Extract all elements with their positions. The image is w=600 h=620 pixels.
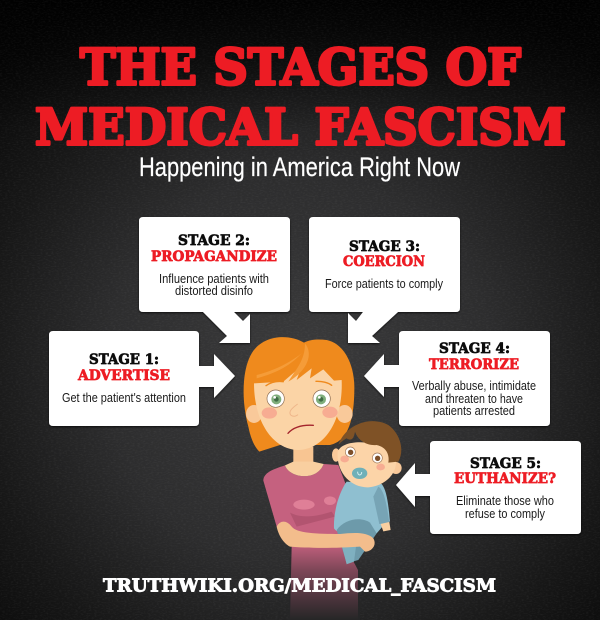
mother: face — [254, 366, 342, 450]
stage 5 box and arrow — [396, 441, 581, 534]
stage 4 description: Verbally abuse, intimidate — [412, 379, 536, 393]
title: MEDICAL FASCISM — [35, 98, 566, 156]
stage 3 heading: STAGE 3: — [349, 239, 420, 255]
stage 3 name: COERCION — [343, 254, 425, 270]
baby: head — [332, 421, 402, 487]
stage 1 description: Get the patient's attention — [62, 391, 186, 405]
mother: hair back — [244, 337, 354, 452]
stage 5 name: EUTHANIZE? — [454, 471, 556, 487]
stage 5 description: refuse to comply — [465, 507, 546, 521]
mother: eyebrows — [266, 381, 332, 386]
stage 5 heading: STAGE 5: — [470, 456, 541, 472]
baby: hand — [381, 522, 391, 531]
title: THE STAGES OF — [80, 38, 521, 96]
stage 3 description: Force patients to comply — [325, 277, 444, 291]
illustration: mother holding baby — [244, 337, 402, 620]
mother: eyes — [267, 390, 330, 407]
stage 2 description: distorted disinfo — [175, 284, 253, 298]
stage 4 description: and threaten to have — [425, 392, 523, 406]
stage 2 box and arrow — [139, 217, 290, 343]
stage 5 description: Eliminate those who — [456, 494, 554, 508]
stage 4 box and arrow — [364, 331, 550, 426]
stage 4 callout — [364, 331, 550, 426]
stage 2 name: PROPAGANDIZE — [151, 249, 277, 265]
stage 4 heading: STAGE 4: — [439, 341, 510, 357]
stage 4 name: TERRORIZE — [429, 357, 519, 373]
stage 2 description — [159, 272, 269, 298]
stage 3 callout — [309, 217, 460, 343]
footer url: TRUTHWIKI.ORG/MEDICAL_FASCISM — [103, 576, 496, 596]
stage 2 description: Influence patients with — [159, 272, 269, 286]
stage 4 description: patients arrested — [433, 404, 515, 418]
mother: body and shirt — [263, 447, 360, 620]
mother: ears — [246, 405, 353, 423]
stage 1 box and arrow — [49, 331, 235, 426]
stage 1 name: ADVERTISE — [77, 368, 170, 384]
stage 3 box and arrow — [309, 217, 460, 343]
stage 2 callout — [139, 217, 290, 343]
mother: hair strands — [288, 343, 309, 382]
stage 5 callout — [396, 441, 581, 534]
stage 1 heading: STAGE 1: — [89, 352, 159, 368]
stage 2 heading: STAGE 2: — [178, 233, 250, 249]
mother: arm — [277, 522, 375, 552]
stage 5 description — [456, 494, 554, 521]
mother: cheeks, nose, mouth — [262, 404, 338, 433]
stage 4 description — [412, 379, 536, 418]
subtitle: Happening in America Right Now — [139, 152, 460, 182]
title — [35, 38, 566, 156]
baby: body — [334, 482, 390, 564]
stage 1 callout — [49, 331, 235, 426]
